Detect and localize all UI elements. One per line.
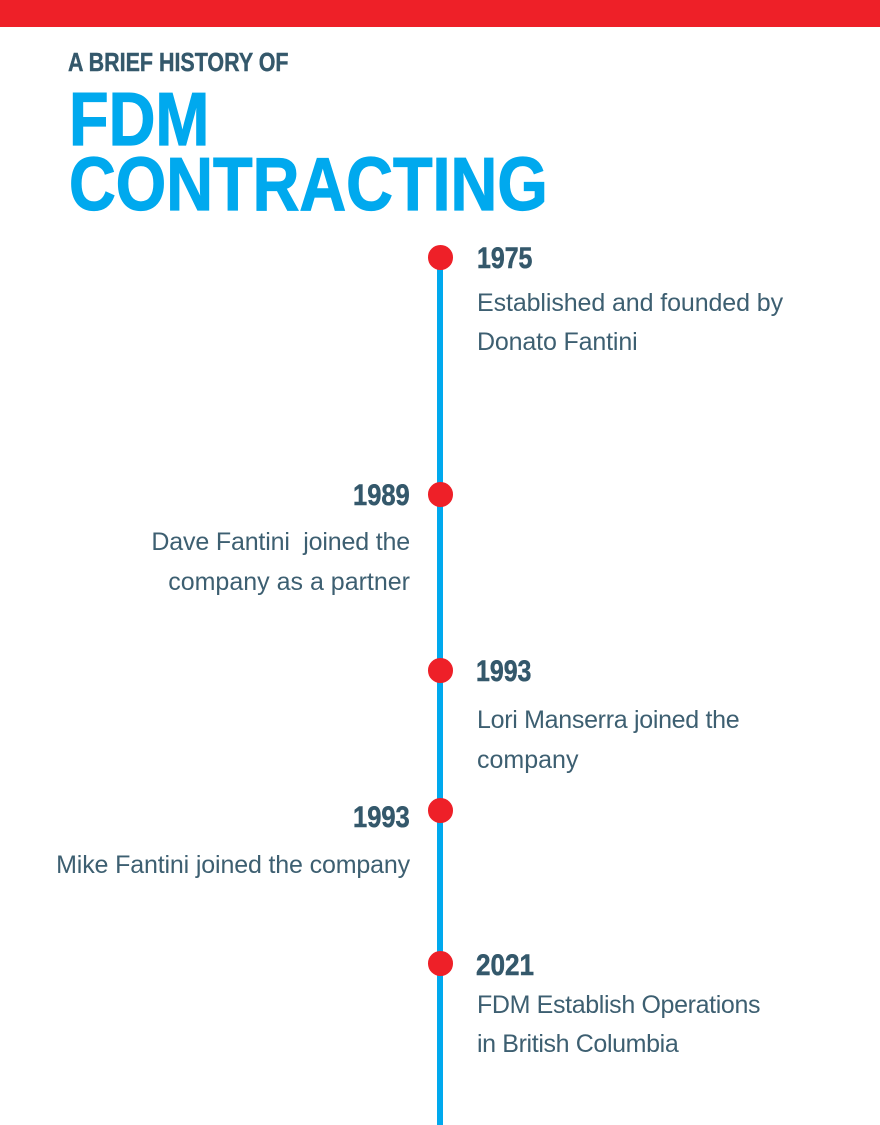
top red bar [0,0,880,27]
marker: 1993 Lori [428,658,452,682]
year 1975: 1975 [477,242,532,275]
timeline line [436,256,443,1125]
description 1975 [477,289,783,356]
subtitle: A BRIEF HISTORY OF [68,47,288,77]
description Lori: company [477,746,578,774]
year 1993: 1993 [353,801,410,834]
marker: 1975 [428,245,452,270]
description 2021: in British Columbia [477,1030,678,1058]
year 1989: 1989 [353,479,410,512]
description 1989 [151,528,410,596]
title: CONTRACTING [69,142,548,226]
event: 1993 Lori [476,655,739,774]
title [69,77,548,226]
event: 1975 [477,242,783,356]
description 1989: Dave Fantini joined the [151,528,410,556]
marker: 1993 Mike [428,798,452,822]
description 2021 [477,991,760,1058]
year 2021: 2021 [476,949,534,982]
event: 1989 [151,479,410,596]
marker: 1989 [428,482,452,506]
description Lori [477,706,739,774]
event: 1993 Mike [56,801,410,879]
year 1993: 1993 [476,655,531,688]
description Mike: Mike Fantini joined the company [56,851,410,879]
event: 2021 [476,949,760,1058]
marker: 2021 [428,951,452,976]
title: FDM [69,77,209,161]
description 1975: Donato Fantini [477,328,638,356]
description 2021: FDM Establish Operations [477,991,760,1019]
description 1989: company as a partner [168,568,410,596]
description 1975: Established and founded by [477,289,783,317]
description Lori: Lori Manserra joined the [477,706,739,734]
